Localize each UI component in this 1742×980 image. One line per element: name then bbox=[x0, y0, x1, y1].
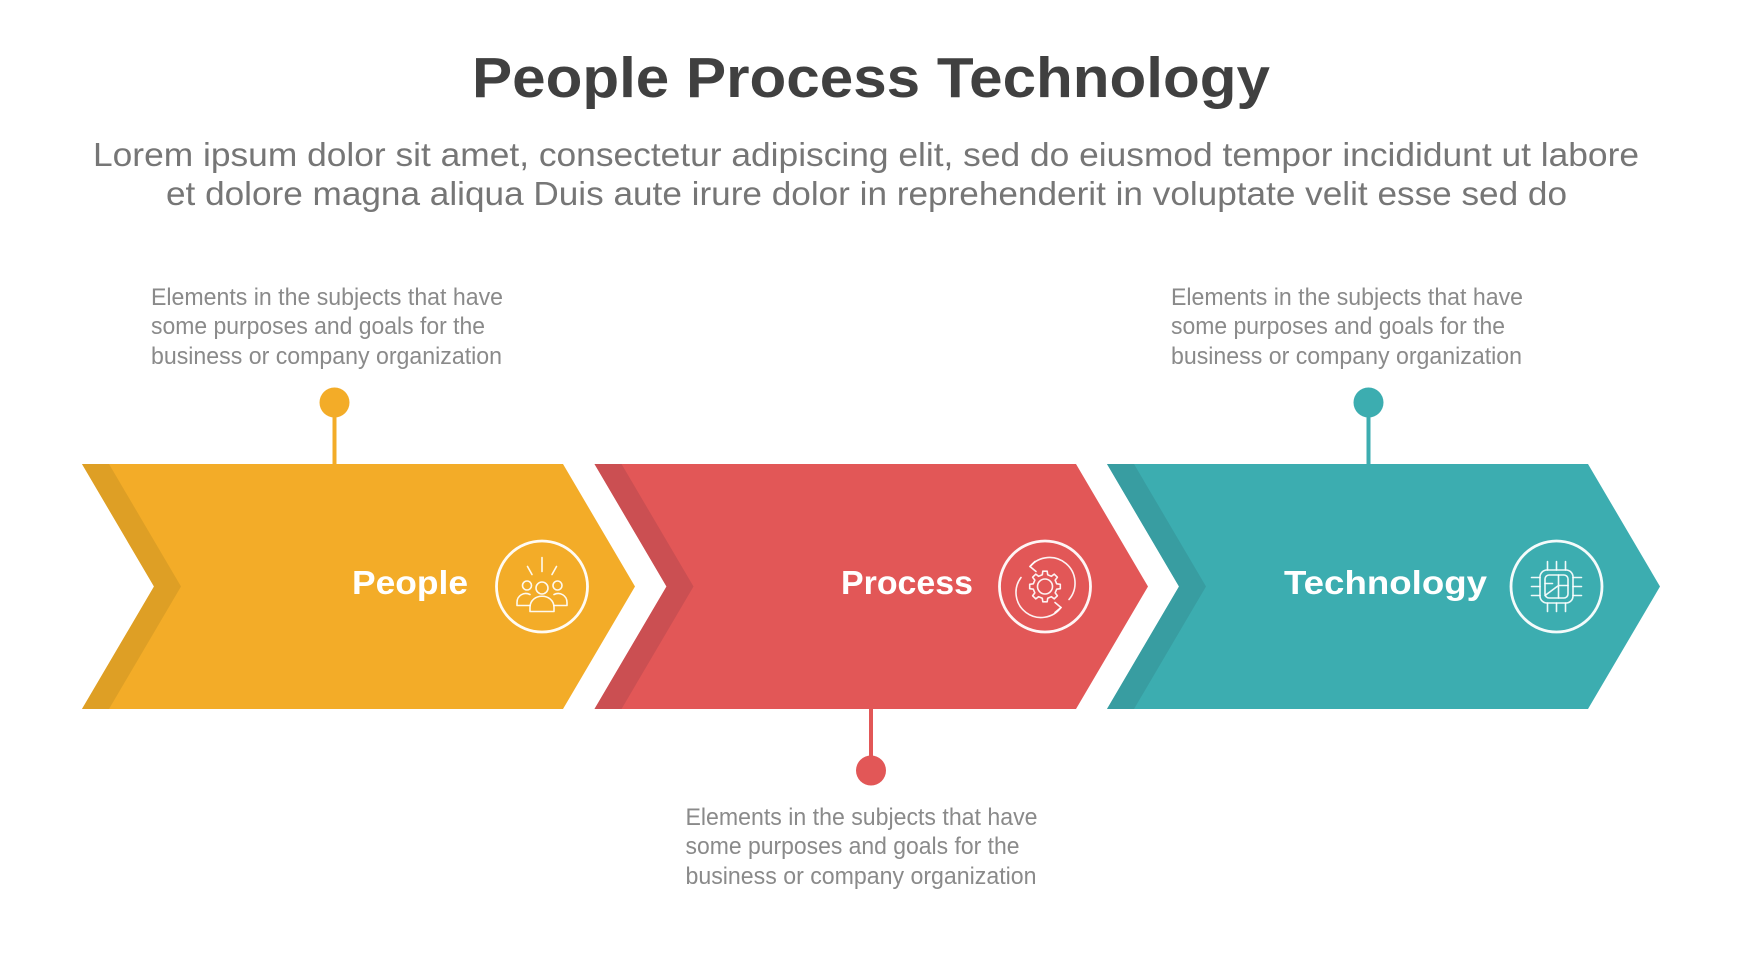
icon: people bbox=[496, 541, 588, 632]
subtitle text: et dolore magna aliqua Duis aute irure dolor in reprehenderit in voluptate velit esse sed do bbox=[166, 175, 1567, 212]
callout text: process: Elements in the subjects that have bbox=[686, 804, 1038, 831]
label: process: Process bbox=[841, 564, 973, 601]
label: people: People bbox=[352, 564, 468, 601]
pin: process bbox=[856, 708, 886, 786]
label: technology: Technology bbox=[1284, 564, 1488, 601]
pin: technology bbox=[1354, 388, 1384, 465]
arrow: people bbox=[82, 464, 635, 709]
callout text: process bbox=[686, 804, 1038, 890]
callout text: people: Elements in the subjects that have bbox=[151, 284, 503, 311]
icon: technology bbox=[1511, 541, 1602, 632]
callout text: technology: Elements in the subjects that have bbox=[1171, 284, 1523, 311]
title: People Process Technology bbox=[472, 46, 1270, 110]
callout text: people: business or company organization bbox=[151, 343, 502, 370]
subtitle text bbox=[93, 136, 1639, 212]
pin: people bbox=[320, 388, 350, 465]
callout text: process: some purposes and goals for the bbox=[686, 833, 1020, 860]
arrow: process bbox=[594, 464, 1148, 709]
icon: process bbox=[1000, 541, 1090, 632]
callout text: technology bbox=[1171, 284, 1523, 370]
callout text: technology: some purposes and goals for the bbox=[1171, 313, 1505, 340]
callout text: technology: business or company organization bbox=[1171, 343, 1522, 370]
arrow: technology bbox=[1107, 464, 1660, 709]
callout text: people bbox=[151, 284, 503, 370]
callout text: process: business or company organization bbox=[686, 863, 1036, 890]
callout text: people: some purposes and goals for the bbox=[151, 313, 485, 340]
subtitle text: Lorem ipsum dolor sit amet, consectetur adipiscing elit, sed do eiusmod tempor incididunt ut labore bbox=[93, 136, 1639, 173]
